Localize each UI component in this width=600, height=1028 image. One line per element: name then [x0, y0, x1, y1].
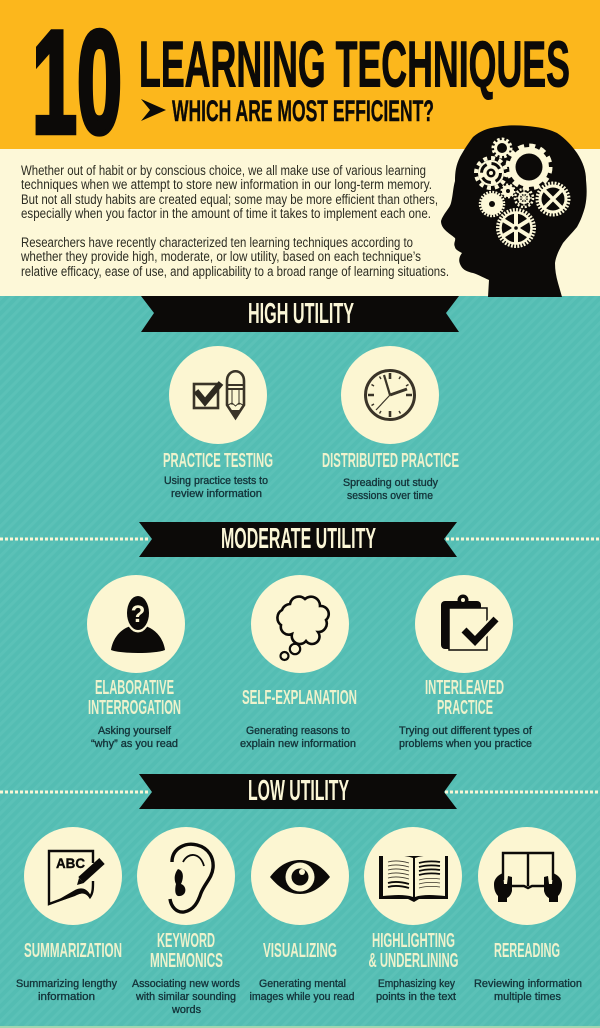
heading [88, 677, 181, 719]
gear: cross wheel [538, 184, 568, 214]
icon: clipboard with check [441, 594, 496, 650]
icon: eye [270, 860, 330, 894]
description [16, 978, 117, 1003]
description: Trying out different types of [399, 725, 533, 737]
description: Generating mental [259, 978, 346, 990]
description: Using practice tests to [164, 475, 268, 487]
technique: elaborative interrogation [87, 575, 185, 750]
icon: open book [379, 855, 448, 902]
icon: clock [366, 370, 414, 420]
description: problems when you practice [399, 738, 532, 750]
gear: tiny [502, 184, 514, 198]
icon: paper and pencil: ABC [56, 855, 85, 871]
description [376, 978, 457, 1003]
heading: & UNDERLINING [368, 950, 458, 972]
description: Reviewing information [474, 978, 582, 990]
description: images while you read [250, 991, 354, 1003]
technique: visualizing [250, 827, 354, 1003]
heading: MNEMONICS [150, 950, 223, 972]
ribbon: high utility [141, 296, 459, 332]
heading: INTERROGATION [88, 697, 181, 719]
icon: checkbox and pencil [194, 371, 244, 418]
description [132, 978, 240, 1016]
description: Asking yourself [98, 725, 172, 737]
heading: PRACTICE [437, 697, 493, 719]
gear: top small [493, 139, 511, 157]
heading: HIGHLIGHTING [372, 930, 455, 952]
heading: SUMMARIZATION [24, 940, 122, 962]
icon: ear [170, 844, 213, 912]
description [250, 978, 354, 1003]
section: high utility [141, 296, 459, 502]
big number 10: 10 [32, 0, 122, 164]
description: with similar sounding [135, 991, 236, 1003]
icon: person with question mark: ? [131, 601, 145, 628]
intro text: especially when you factor in the amount of time it takes to implement each one. [21, 206, 431, 221]
description [240, 725, 356, 750]
description: Summarizing lengthy [16, 978, 117, 990]
heading: ELABORATIVE [95, 677, 174, 699]
section: low utility [16, 774, 582, 1016]
gear: large [508, 146, 550, 188]
intro panel [0, 149, 600, 296]
ribbon: moderate utility [139, 522, 457, 557]
heading [368, 930, 458, 972]
intro text: whether they provide high, moderate, or low utility, based on each technique’s [20, 249, 421, 264]
heading: SELF-EXPLANATION [242, 687, 357, 709]
intro text: Whether out of habit or by conscious choice, we all make use of various learning [21, 163, 426, 178]
heading: KEYWORD [157, 930, 215, 952]
description: Spreading out study [343, 477, 438, 489]
technique: self-explanation [240, 575, 357, 750]
gear: spoked wheel [498, 210, 534, 246]
icon: paper and pencil [49, 851, 102, 905]
ribbon: high utility: HIGH UTILITY [248, 298, 354, 330]
heading [150, 930, 223, 972]
description: words [171, 1004, 201, 1016]
description: “why” as you read [91, 738, 178, 750]
icon: hands holding book [494, 853, 562, 902]
header band [0, 0, 600, 164]
technique: distributed practice [322, 346, 459, 502]
intro text: But not all study habits are created equal; some may be more efficient than others, [21, 192, 438, 207]
arrow [141, 99, 166, 121]
icon: thought cloud [277, 597, 329, 660]
heading: DISTRIBUTED PRACTICE [322, 450, 459, 472]
description [474, 978, 582, 1003]
technique: interleaved practice [399, 575, 533, 750]
icon: head with gears [441, 125, 587, 297]
description: Associating new words [132, 978, 240, 990]
intro text: relative efficacy, ease of use, and applicability to a broad range of learning situations. [21, 264, 449, 279]
description: Generating reasons to [246, 725, 350, 737]
gear: dot wheel [480, 192, 504, 216]
ribbon: low utility: LOW UTILITY [248, 775, 349, 807]
technique: keyword mnemonics [132, 827, 240, 1016]
description [164, 475, 268, 500]
description: points in the text [376, 991, 457, 1003]
gear: filigree [515, 189, 533, 207]
intro text: Researchers have recently characterized ten learning techniques according to [21, 235, 413, 250]
description [343, 477, 438, 502]
description: Emphasizing key [378, 978, 455, 990]
intro text: techniques when we attempt to store new information in our long-term memory. [21, 177, 432, 192]
heading: INTERLEAVED [425, 677, 504, 699]
technique: practice testing [163, 346, 273, 500]
gear: crosshair [476, 158, 506, 188]
icon: person with question mark [111, 596, 165, 653]
section: moderate utility [87, 522, 533, 750]
description: sessions over time [347, 490, 433, 502]
ribbon: low utility [139, 774, 457, 809]
technique: highlighting and underlining [364, 827, 462, 1003]
heading: VISUALIZING [263, 940, 337, 962]
technique: rereading [474, 827, 582, 1003]
description: information [38, 991, 95, 1003]
description [399, 725, 533, 750]
heading [425, 677, 504, 719]
description: review information [171, 488, 262, 500]
technique: summarization [16, 827, 122, 1003]
heading: PRACTICE TESTING [163, 450, 273, 472]
ribbon: moderate utility: MODERATE UTILITY [221, 523, 376, 555]
description: explain new information [240, 738, 356, 750]
intro text [20, 163, 449, 279]
description [91, 725, 178, 750]
description: multiple times [494, 991, 561, 1003]
